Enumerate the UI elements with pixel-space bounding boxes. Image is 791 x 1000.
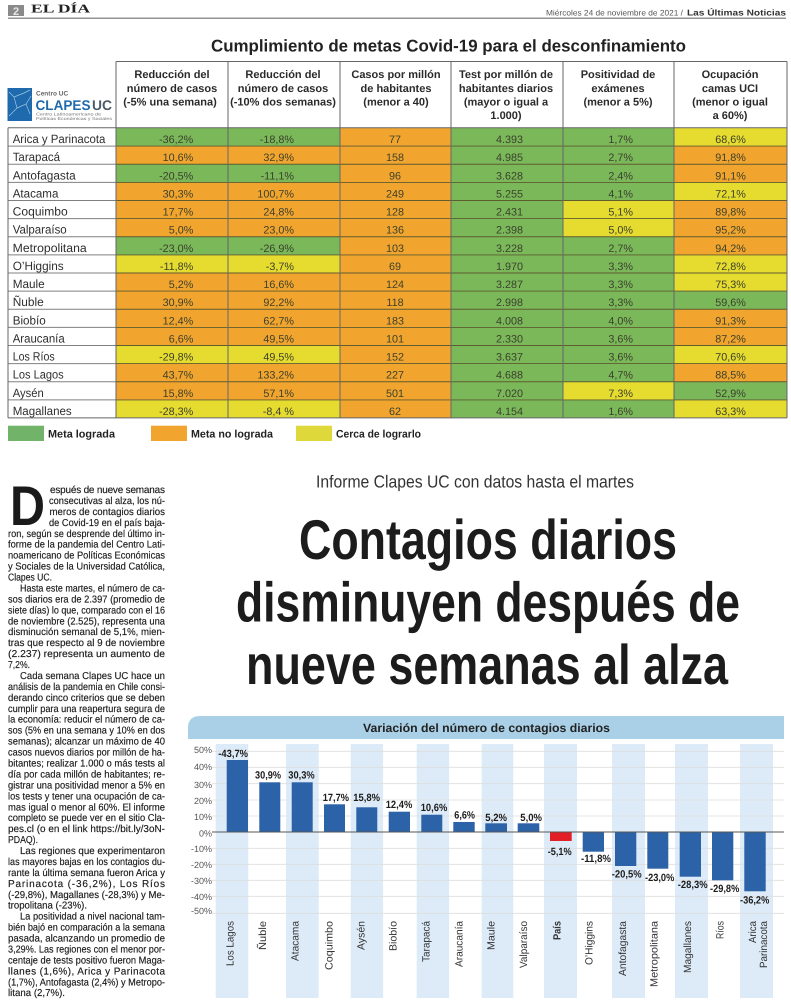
paragraph 5 (8, 912, 165, 999)
row: Tarapacá: Tarapacá (13, 150, 60, 164)
row: Araucanía: 101 (386, 333, 404, 345)
row: Magallanes: -8,4 % (263, 406, 294, 418)
row: O'Higgins: -3,7% (266, 261, 294, 273)
y axis labels: -10% (191, 844, 212, 854)
row: Valparaíso: 136 (386, 225, 404, 237)
row: Los Lagos: 4,7% (608, 370, 633, 382)
row: Valparaíso: 2.398 (496, 225, 523, 237)
paragraph 3: pes.cl (o en el link https://bit.ly/3oN- (8, 824, 165, 835)
paragraph 3: análisis de la pandemia en Chile consi- (8, 682, 165, 693)
row: Coquimbo: 17,7% (163, 206, 194, 218)
row: Ñuble: 30,9% (163, 297, 194, 309)
row: Biobío: 91,3% (715, 315, 746, 327)
paragraph 2 (8, 584, 165, 671)
paragraph 1: y Sociales de la Universidad Católica, (8, 562, 165, 573)
row: Antofagasta: -11,1% (261, 170, 294, 182)
paragraph 1: de Covid-19 en el país baja- (49, 518, 165, 529)
paragraph 3: PDAQ). (8, 835, 38, 846)
row: Tarapacá: 2,7% (608, 152, 633, 164)
row: Valparaíso: 95,2% (715, 225, 746, 237)
bar chart: variación del número de contagios diarios (188, 716, 784, 998)
row: Ñuble: Ñuble (13, 295, 44, 309)
paragraph 3: semanas); alcanzar un máximo de 40 (8, 737, 165, 748)
headline (236, 508, 740, 696)
row: Araucanía (13, 327, 787, 346)
row: Antofagasta: -20,5% (159, 170, 194, 182)
paragraph 5: pasada, alcanzando un promedio de (8, 934, 165, 944)
row: Atacama: 5.255 (496, 188, 523, 200)
row: Antofagasta: Antofagasta (13, 168, 76, 182)
paragraph 3: Cada semana Clapes UC hace un (20, 671, 165, 682)
row: Biobío: 4.008 (496, 315, 523, 327)
paragraph 1: forme de la pandemia del Centro Lati- (8, 540, 165, 551)
row: Antofagasta: 3.628 (496, 170, 523, 182)
legend: meta no lograda: Meta no lograda (191, 428, 274, 440)
date: Miércoles 24 de noviembre de 2021 / (546, 8, 684, 18)
category labels: Los Lagos (224, 921, 236, 966)
row: Atacama: Atacama (13, 186, 59, 200)
paragraph 3: sos (5% en una semana y 10% en dos (8, 726, 165, 737)
chart title band (188, 716, 784, 739)
row: O'Higgins: -11,8% (160, 261, 194, 273)
paragraph 3: casos nuevos diarios por millón de ha- (8, 748, 165, 759)
row: Atacama: 100,7% (257, 188, 294, 200)
row: Metropolitana: 94,2% (715, 243, 746, 255)
row: Valparaíso: 5,0% (169, 225, 194, 237)
row: O'Higgins: 69 (389, 261, 401, 273)
y axis labels: 50% (194, 745, 212, 755)
header: reducción dos semanas: número de casos (238, 83, 328, 95)
category labels: O’Higgins (584, 921, 596, 965)
row: Coquimbo: 89,8% (715, 206, 746, 218)
logo: Clapes UC: Políticas Económicas y Sociales (36, 116, 112, 121)
header: casos por millón: de habitantes (361, 83, 431, 95)
row: O'Higgins: 1.970 (496, 261, 523, 273)
row: Coquimbo: 5,1% (608, 206, 633, 218)
row: Tarapacá: 158 (386, 152, 404, 164)
row: Metropolitana: -23,0% (159, 243, 194, 255)
logo: Clapes UC: CLAPES (36, 97, 90, 113)
row: Magallanes: 63,3% (715, 406, 746, 418)
article body text (8, 474, 165, 999)
paragraph 2: siete días) lo que, comparado con el 16 (8, 605, 165, 616)
row: Maule (13, 273, 787, 291)
paragraph 5: centaje de tests positivo fueron Maga- (8, 955, 165, 966)
kicker: Informe Clapes UC con datos hasta el martes (316, 472, 634, 492)
header: casos por millón: Casos por millón (351, 69, 441, 81)
y axis labels: 20% (194, 796, 212, 806)
header: reducción una semana: número de casos (127, 83, 217, 95)
header: reducción una semana: (-5% una semana) (123, 96, 217, 108)
category labels: Maule (486, 921, 498, 950)
section name: EL DÍA (31, 2, 90, 16)
row: Ñuble: 59,6% (715, 297, 746, 309)
y axis labels: -40% (191, 892, 212, 902)
row: Maule: 124 (386, 279, 404, 291)
row: Magallanes (13, 400, 787, 418)
row: Tarapacá (13, 146, 787, 164)
y axis labels: 0% (199, 828, 212, 838)
paragraph 5: La positividad a nivel nacional tam- (20, 912, 165, 923)
row: Los Ríos: 3.637 (496, 352, 523, 364)
header: test por millón: (mayor o igual a (464, 96, 549, 108)
value labels: 15,8% (353, 792, 381, 804)
value labels: 10,6% (421, 802, 448, 814)
row: Los Lagos: Los Lagos (13, 368, 64, 382)
row: O'Higgins: 72,8% (715, 261, 746, 273)
paragraph 1: ron, según se desprende del último in- (8, 529, 165, 540)
row: Valparaíso: 23,0% (263, 225, 294, 237)
value labels: 5,2% (485, 812, 508, 824)
category labels: Aysén (356, 921, 368, 950)
paragraph 5: llanes (1,6%), Arica y Parinacota (8, 966, 165, 977)
paragraph 5: (1,7%), Antofagasta (2,4%) y Metropo- (8, 977, 165, 988)
row: Ñuble: 92,2% (263, 297, 294, 309)
row: Valparaíso: 5,0% (608, 225, 633, 237)
row: Ñuble: 118 (386, 297, 404, 309)
row: Los Lagos: 227 (386, 370, 404, 382)
row: Los Lagos: 4.688 (496, 370, 523, 382)
row: Los Ríos: 152 (386, 352, 404, 364)
row: Ñuble: 2.998 (496, 297, 523, 309)
row: Aysén: Aysén (13, 386, 44, 400)
row: Araucanía: 49,5% (263, 333, 294, 345)
category labels: Atacama (290, 921, 302, 961)
paragraph 5: bién bajó en comparación a la semana (8, 923, 165, 934)
legend (8, 426, 421, 441)
row: O'Higgins (13, 255, 787, 273)
chart title band: Variación del número de contagios diarios (363, 721, 610, 735)
paragraph 4: Parinacota (-36,2%), Los Ríos (8, 879, 165, 890)
category labels: Tarapacá (420, 921, 432, 962)
row: Biobío (13, 309, 787, 327)
page number icon: 2 (13, 6, 19, 18)
row: Metropolitana: Metropolitana (13, 241, 87, 255)
row: Maule: Maule (13, 277, 45, 291)
headline: Contagios diarios (299, 508, 677, 571)
row: Coquimbo: 128 (386, 206, 404, 218)
header: test por millón: habitantes diarios (459, 83, 553, 95)
paragraph 2: 7,2%. (8, 660, 30, 671)
value labels: -36,2% (740, 894, 770, 906)
header: reducción dos semanas: (-10% dos semanas) (230, 96, 336, 108)
header: reducción una semana: Reducción del (134, 69, 210, 81)
alternating column bands (216, 744, 773, 998)
category labels: Ríos (714, 921, 726, 939)
logo: Clapes UC (8, 88, 112, 121)
value labels: 12,4% (386, 799, 413, 811)
category labels: Valparaíso (518, 921, 530, 968)
row: Magallanes: 4.154 (496, 406, 523, 418)
logo: Clapes UC: Centro Latinoamericano de (36, 112, 102, 116)
paragraph 2: Hasta este martes, el número de ca- (20, 584, 165, 594)
row: Ñuble (13, 291, 787, 309)
row: Magallanes: 1,6% (608, 406, 633, 418)
value labels: 6,6% (454, 810, 476, 822)
row: Antofagasta: 91,1% (715, 170, 746, 182)
row: Metropolitana (13, 237, 787, 255)
paragraph 1: noamericano de Políticas Económicas (8, 551, 165, 562)
row: Araucanía: Araucanía (13, 331, 65, 345)
row: Biobío: 62,7% (263, 315, 294, 327)
table title: Cumplimiento de metas Covid-19 para el desconfinamiento (211, 36, 686, 56)
paragraph 4 (8, 846, 165, 912)
page header bar (8, 2, 786, 19)
row: Biobío: 12,4% (163, 315, 194, 327)
row: Aysén (13, 382, 787, 400)
row: Tarapacá: 32,9% (263, 152, 294, 164)
row: Arica y Parinacota: -18,8% (260, 134, 294, 146)
row: Maule: 16,6% (263, 279, 294, 291)
header: test por millón: 1.000) (490, 110, 522, 122)
drop cap: D (10, 474, 45, 537)
row: Atacama (13, 182, 787, 201)
row: Los Ríos: 70,6% (715, 352, 746, 364)
row: Arica y Parinacota: Arica y Parinacota (13, 132, 106, 146)
row: Los Ríos (13, 346, 787, 364)
row: Metropolitana: 103 (386, 243, 404, 255)
row: Los Lagos: 88,5% (715, 370, 746, 382)
bars (227, 760, 766, 891)
row: Aysén: 501 (386, 388, 404, 400)
row: Coquimbo: Coquimbo (13, 204, 68, 218)
row: Maule: 3,3% (608, 279, 633, 291)
row: Arica y Parinacota: -36,2% (159, 134, 194, 146)
y axis labels (191, 745, 212, 916)
row: Maule: 5,2% (169, 279, 194, 291)
paragraph 5: litana (2,7%). (8, 988, 65, 999)
paragraph 4: rante la última semana fueron Arica y (8, 868, 165, 879)
page number icon (8, 5, 24, 18)
row: Los Ríos: 3,6% (608, 352, 633, 364)
value labels: 30,3% (288, 770, 315, 782)
category labels: Parinacota (758, 921, 770, 968)
row: Magallanes: 62 (389, 406, 401, 418)
row: Aysén: 57,1% (263, 388, 294, 400)
row: Metropolitana: -26,9% (260, 243, 294, 255)
row: Biobío: Biobío (13, 313, 46, 327)
category labels: Metropolitana (648, 921, 660, 987)
header: ocupación UCI: Ocupación (702, 69, 758, 81)
paragraph 4: tropolitana (-23%). (8, 901, 87, 912)
value labels: 17,7% (323, 792, 350, 804)
paragraph 5: 3,29%. Las regiones con el menor por- (8, 944, 165, 956)
paragraph 1: consecutivas al alza, los nú- (49, 496, 165, 507)
row: Coquimbo: 2.431 (496, 206, 523, 218)
row: Aysén: 52,9% (715, 388, 746, 400)
row: Atacama: 249 (386, 188, 404, 200)
row: Aysén: 15,8% (163, 388, 194, 400)
row: Arica y Parinacota: 77 (389, 134, 401, 146)
category labels: País (552, 921, 564, 940)
paragraph 4: Las regiones que experimentaron (20, 846, 165, 857)
paragraph 1: Clapes UC. (8, 572, 52, 584)
header: reducción dos semanas: Reducción del (245, 69, 321, 81)
y axis labels: 10% (194, 812, 212, 822)
row: Maule: 75,3% (715, 279, 746, 291)
y axis labels: -20% (191, 860, 212, 870)
paragraph 3: día por cada millón de habitantes; re- (8, 769, 165, 780)
header: casos por millón: (menor a 40) (363, 96, 429, 108)
row: Magallanes: Magallanes (13, 404, 72, 418)
row: Arica y Parinacota (13, 128, 787, 146)
row: Magallanes: -28,3% (159, 406, 194, 418)
header: ocupación UCI: a 60%) (713, 110, 748, 122)
paragraph 2: sos diarios era de 2.397 (promedio de (8, 594, 165, 605)
row: Valparaíso: Valparaíso (13, 223, 67, 237)
paragraph 1 (8, 485, 165, 584)
value labels (218, 748, 770, 906)
paragraph 2: tras que respecto al 9 de noviembre (8, 638, 165, 649)
row: O'Higgins: 3,3% (608, 261, 633, 273)
row: Arica y Parinacota: 1,7% (608, 134, 633, 146)
row: Antofagasta (13, 164, 787, 182)
header: positividad: Positividad de (581, 69, 655, 81)
paragraph 3: los tests y tener una ocupación de ca- (8, 791, 165, 802)
paragraph 3: mas igual o menor al 60%. El informe (8, 802, 165, 813)
row: Coquimbo (13, 200, 787, 219)
row: Los Lagos (13, 364, 787, 382)
row: Tarapacá: 10,6% (163, 152, 194, 164)
paragraph 3: la economía: reducir el número de ca- (8, 715, 165, 726)
row: Atacama: 4,1% (608, 188, 633, 200)
value labels: -11,8% (581, 853, 612, 865)
paragraph 2: (2.237) representa un aumento de (8, 649, 165, 660)
paragraph 3: cumplir para una reapertura segura de (8, 704, 165, 715)
legend: meta lograda (8, 426, 116, 441)
paragraph 3: bitantes; realizar 1.000 o más tests al (8, 758, 165, 770)
logo: Clapes UC: Centro UC (36, 90, 68, 98)
header: ocupación UCI: (menor o igual (692, 96, 768, 108)
category labels: Ñuble (256, 921, 269, 950)
paragraph 3: completo se puede ver en el sitio Cla- (8, 813, 165, 824)
category labels: Coquimbo (324, 921, 336, 970)
row: Tarapacá: 4.985 (496, 152, 523, 164)
value labels: -28,3% (678, 879, 708, 891)
paragraph 3 (8, 671, 165, 846)
row: Los Ríos: Los Ríos (13, 350, 55, 364)
category labels: Biobío (388, 921, 400, 951)
value labels: 30,9% (255, 770, 282, 782)
row: Coquimbo: 24,8% (263, 206, 294, 218)
paragraph 2: de noviembre (2.525), representa una (8, 616, 165, 627)
row: Antofagasta: 96 (389, 170, 401, 182)
row: Aysén: 7,3% (608, 388, 633, 400)
row: Aysén: 7.020 (496, 388, 523, 400)
row: Arica y Parinacota: 68,6% (715, 134, 746, 146)
value labels: -20,5% (612, 868, 642, 880)
paragraph 1: espués de nueve semanas (50, 485, 165, 496)
row: Los Lagos: 43,7% (163, 370, 194, 382)
row: Maule: 3.287 (496, 279, 523, 291)
row: Tarapacá: 91,8% (715, 152, 746, 164)
paragraph 1: meros de contagios diarios (50, 507, 165, 518)
header: positividad: (menor a 5%) (583, 96, 653, 108)
value labels: -43,7% (218, 748, 249, 760)
category labels: Magallanes (682, 921, 694, 973)
value labels: 5,0% (520, 812, 543, 824)
category labels: Araucanía (454, 921, 466, 967)
column headers (123, 69, 768, 122)
row: Los Ríos: 49,5% (263, 352, 294, 364)
row: Antofagasta: 2,4% (608, 170, 633, 182)
row: Araucanía: 2.330 (496, 333, 523, 345)
value labels: -29,8% (710, 883, 740, 895)
row: Metropolitana: 3.228 (496, 243, 523, 255)
row: Arica y Parinacota: 4.393 (496, 134, 523, 146)
row: Araucanía: 6,6% (169, 333, 194, 345)
row: Araucanía: 3,6% (608, 333, 633, 345)
y axis labels: -30% (191, 876, 212, 886)
paragraph 3: derando cinco criterios que se deben (8, 693, 165, 704)
row: Araucanía: 87,2% (715, 333, 746, 345)
legend: meta no lograda (151, 426, 274, 441)
row: Biobío: 183 (386, 315, 404, 327)
category labels: Antofagasta (617, 921, 629, 976)
legend: cerca de lograrlo (296, 426, 421, 441)
newspaper name: Las Últimas Noticias (687, 8, 786, 18)
row: Metropolitana: 2,7% (608, 243, 633, 255)
row: Los Ríos: -29,8% (159, 352, 194, 364)
row: Los Lagos: 133,2% (257, 370, 294, 382)
category labels: Arica (747, 921, 759, 943)
row: Atacama: 72,1% (715, 188, 746, 200)
compliance table (8, 62, 787, 418)
row: Ñuble: 3,3% (608, 297, 633, 309)
row: O'Higgins: O’Higgins (13, 259, 64, 273)
y axis labels: 30% (194, 780, 212, 790)
category labels (224, 921, 770, 987)
header: positividad: exámenes (591, 83, 645, 95)
paragraph 3: gistrar una positividad menor a 5% en (8, 780, 165, 791)
header: ocupación UCI: camas UCI (702, 83, 758, 95)
value labels: -5,1% (548, 846, 572, 858)
legend: meta lograda: Meta lograda (48, 428, 116, 440)
y axis labels: 40% (194, 762, 212, 772)
row: Biobío: 4,0% (608, 315, 633, 327)
paragraph 4: las mayores bajas en los contagios du- (8, 857, 165, 868)
paragraph 2: disminución semanal de 5,1%, mien- (8, 627, 165, 638)
logo: Clapes UC: UC (92, 97, 112, 113)
row: Atacama: 30,3% (163, 188, 194, 200)
row: Valparaíso (13, 219, 787, 237)
value labels: -23,0% (645, 872, 675, 884)
y axis labels: -50% (191, 906, 212, 916)
header: test por millón: Test por millón de (459, 69, 553, 81)
paragraph 4: (-29,8%), Magallanes (-28,3%) y Me- (8, 890, 165, 901)
legend: cerca de lograrlo: Cerca de lograrlo (336, 428, 421, 440)
